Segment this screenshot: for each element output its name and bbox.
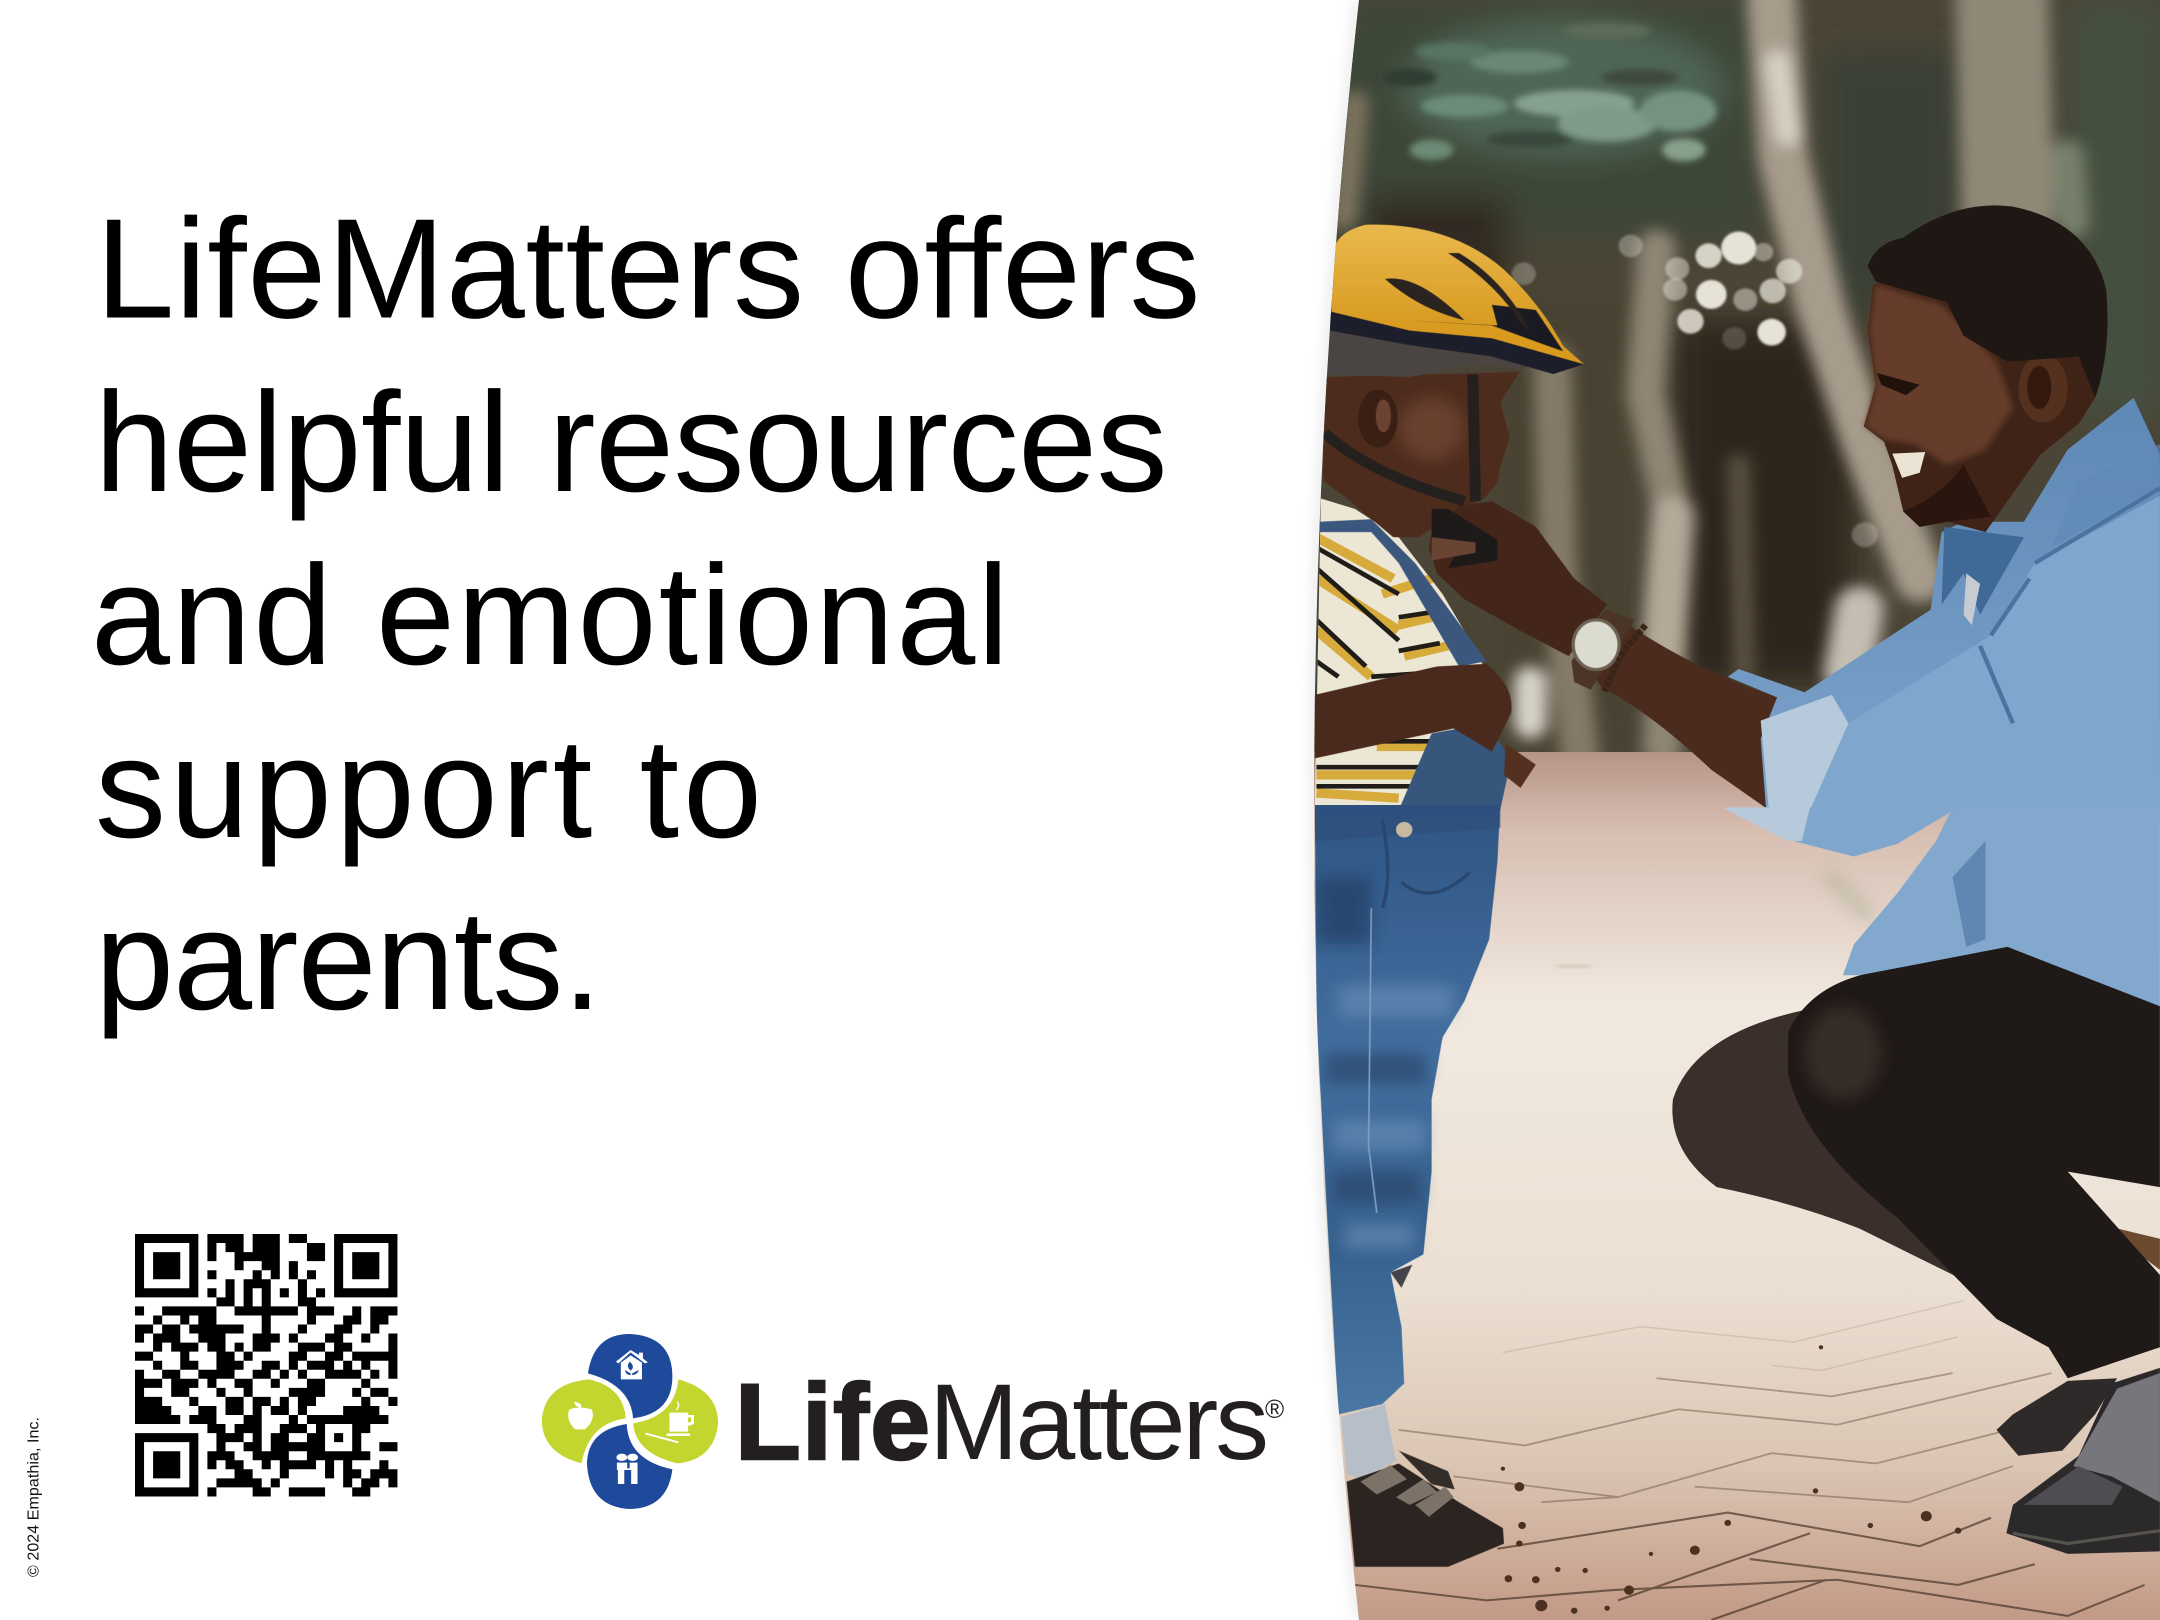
QR code bbox=[135, 1234, 397, 1496]
father's shirt lower bbox=[1843, 807, 2160, 1006]
logo mark bbox=[542, 1334, 718, 1509]
front shoe bbox=[2006, 1368, 2160, 1554]
logo wordmark: Matters bbox=[929, 1362, 1269, 1482]
tree foliage bbox=[1382, 23, 1717, 161]
child bbox=[1300, 225, 1645, 1567]
father's arm bbox=[1596, 610, 1777, 808]
father's head and hair bbox=[1864, 205, 2108, 532]
helmet bbox=[1328, 331, 1522, 378]
brick ground bbox=[1270, 752, 2160, 1620]
helmet strap bbox=[1325, 375, 1475, 501]
headline: LifeMatters offers bbox=[96, 190, 1200, 348]
child's overall straps and bib bbox=[1320, 519, 1486, 666]
child's arm bbox=[1315, 664, 1512, 758]
logo wordmark: Life bbox=[735, 1362, 930, 1482]
child's jeans and shoes bbox=[1315, 805, 1504, 1567]
father's trousers and shoes bbox=[1672, 947, 2160, 1554]
bokeh lights bbox=[1512, 231, 1878, 547]
headline: support to bbox=[95, 709, 762, 868]
photo: father and child with bicycle helmet bbox=[1270, 0, 2160, 1620]
photo edge shadow bbox=[1314, 0, 1359, 1620]
headline: helpful resources bbox=[95, 363, 1168, 522]
headline: and emotional bbox=[91, 536, 1009, 695]
copyright: © 2024 Empathia, Inc. bbox=[26, 1417, 42, 1577]
watch bbox=[1571, 610, 1635, 690]
headline bbox=[91, 190, 1200, 1040]
child's shirt bbox=[1300, 225, 1645, 821]
headline: parents. bbox=[95, 881, 602, 1040]
father bbox=[1571, 205, 2160, 1554]
logo wordmark: ® bbox=[1265, 1394, 1284, 1424]
father's hand bbox=[1429, 501, 1607, 656]
LifeMatters logo bbox=[542, 1334, 1284, 1509]
logo wordmark bbox=[735, 1362, 1284, 1482]
child's head bbox=[1323, 372, 1519, 537]
park background bbox=[1270, 0, 2160, 830]
father's shirt bbox=[1728, 398, 2160, 810]
